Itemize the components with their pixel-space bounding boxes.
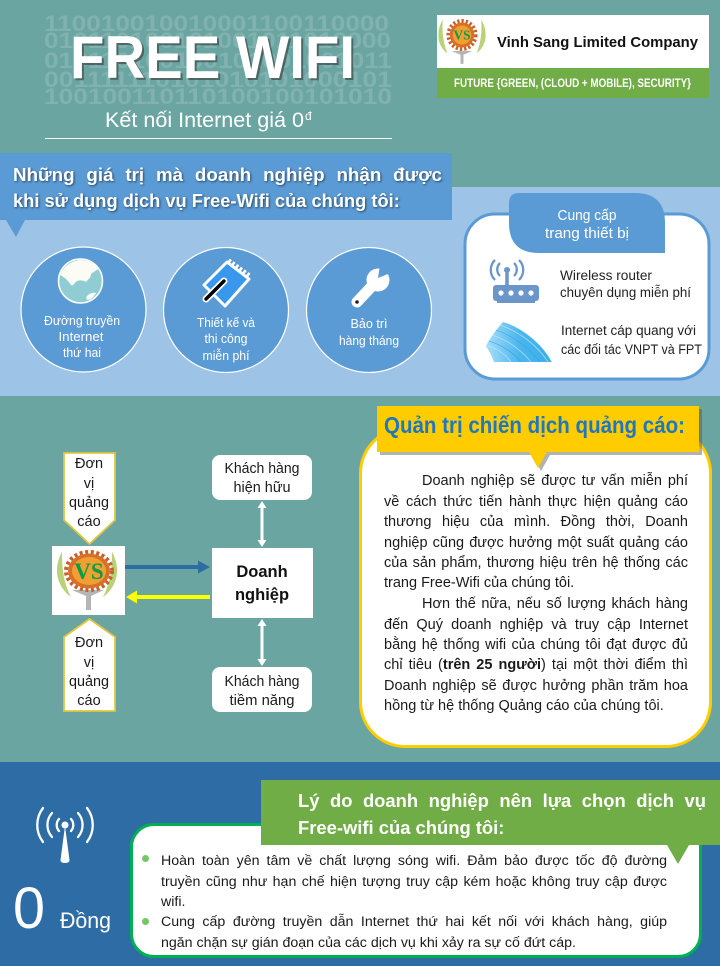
icon: notebook and pen: [204, 261, 250, 306]
node: business: Doanh: [236, 563, 288, 581]
body text: thương hiệu của mình. Đồng thời, Doanh: [384, 514, 688, 530]
bullet: signal quality: wifi.: [161, 894, 185, 910]
bullet: signal quality: [142, 853, 667, 910]
label: Internet: [58, 330, 104, 344]
bullet: signal quality: Hoàn toàn yên tâm về chất lượng sóng wifi. Đảm bảo được tốc độ đường: [161, 853, 667, 869]
node: business: [212, 548, 313, 618]
diagram: advertising flow: [52, 452, 313, 712]
label: Đường truyền: [44, 314, 120, 328]
label: [44, 314, 120, 360]
bullet: second connection: Cung cấp đường truyền dẫn Internet thứ hai kết nối với khách hàng, giúp: [161, 914, 667, 930]
body text: chỉ tiêu (trên 25 người) tại một thời điểm thì: [384, 657, 688, 673]
binary pattern: 010110100101001011010000: [44, 28, 391, 53]
callout: top advertising unit: [64, 453, 115, 544]
body text: đến Quý doanh nghiệp và truy cập Internet: [384, 617, 688, 633]
banner: values heading: khi sử dụng dịch vụ Free-Wifi của chúng tôi:: [13, 190, 400, 211]
background: dark blue band: [0, 762, 720, 966]
circle: free design and installation: [162, 246, 290, 374]
circle: monthly maintenance: [306, 246, 432, 374]
binary pattern: 010110100100101001001011: [44, 48, 392, 73]
label: hàng tháng: [339, 334, 399, 348]
icon: globe: [58, 259, 102, 303]
title block: đ: [305, 109, 312, 123]
arrow: bottom double: [258, 619, 266, 666]
equipment text: chuyên dụng miễn phí: [560, 285, 691, 300]
binary pattern: 100100110110100100101010: [44, 84, 392, 109]
callout: bottom advertising unit: Đơn: [75, 635, 103, 651]
node: potential customers: [212, 667, 312, 712]
body text: nghiệp cũng được hưởng một suất quảng cáo: [384, 535, 688, 551]
price: 0 dong: Đồng: [60, 908, 111, 933]
bullet: second connection: [142, 914, 667, 951]
body text: của sản phẩm, thương hiệu trên hệ thống các: [384, 555, 688, 571]
body text: Hơn thế nữa, nếu số lượng khách hàng: [422, 596, 688, 612]
heading: FREE WIFI: FREE WIFI: [72, 26, 357, 93]
subtitle: Kết nối Internet giá 0: [105, 109, 304, 132]
tab heading: trang thiết bị: [545, 226, 629, 242]
bullet: second connection: ngăn chặn sự gián đoạn của các dịch vụ khi xảy ra sự cố đứt cáp.: [161, 935, 576, 951]
callout: top advertising unit: cáo: [77, 514, 101, 530]
callout: top advertising unit: Đơn: [75, 456, 103, 472]
binary pattern: [44, 11, 392, 109]
binary pattern: 001111110101010101000101: [44, 67, 392, 92]
node: business: nghiệp: [235, 586, 289, 604]
icon: logo: VS: [74, 559, 104, 584]
icon: logo: [52, 546, 125, 615]
price: 0 dong: [13, 876, 111, 941]
equipment text: các đối tác VNPT và FPT: [561, 342, 702, 357]
icon: fibre optic cable: [486, 322, 552, 362]
circle: second internet line: [20, 246, 147, 373]
equipment text: Internet cáp quang với: [561, 323, 696, 338]
arrow: top double: [258, 501, 266, 547]
node: existing customers: [212, 455, 312, 500]
node: existing customers: hiện hữu: [234, 480, 290, 496]
body text: [384, 472, 688, 714]
arrow: blue to business: [125, 560, 210, 574]
heading banner: ad campaign management: [377, 406, 702, 471]
heading: FREE WIFI: FREE WIFI: [70, 24, 355, 91]
icon: wifi antenna: [36, 806, 94, 863]
price: 0 dong: 0: [13, 876, 45, 941]
background: light blue band: [0, 187, 720, 396]
node: potential customers: tiềm năng: [230, 693, 294, 709]
icon: wrench: [355, 265, 393, 304]
heading banner: reasons: Free-wifi của chúng tôi:: [298, 817, 504, 838]
banner: values heading: Những giá trị mà doanh nghiệp nhận được: [13, 164, 442, 185]
body text: Doanh nghiệp sẽ được tư vấn miễn phí: [422, 473, 688, 489]
callout: bottom advertising unit: vị: [84, 655, 94, 671]
equipment text: Wireless router: [560, 268, 652, 283]
title block: [44, 11, 392, 139]
label: [197, 316, 255, 363]
heading banner: reasons: [261, 780, 720, 864]
label: thi công: [204, 332, 248, 346]
binary pattern: 110010010010001100110000: [44, 11, 389, 36]
body text: trang Free-Wifi của chúng tôi.: [384, 575, 574, 591]
callout: bottom advertising unit: cáo: [77, 693, 101, 709]
label: thứ hai: [63, 346, 101, 360]
icon: router: [491, 260, 539, 303]
label: Thiết kế và: [197, 316, 255, 330]
panel: ad campaign management: [359, 436, 712, 748]
label: miễn phí: [202, 348, 250, 363]
callout: bottom advertising unit: quảng: [69, 674, 109, 690]
body text: bằng hệ thống wifi của chúng tôi đạt được đủ: [384, 637, 688, 653]
bullet: signal quality: truyền cũng như hạn chế hiện tượng truy cập kém hoặc không truy cập được: [161, 874, 667, 890]
icon: small logo: [438, 20, 486, 64]
callout: bottom advertising unit: [64, 619, 115, 711]
arrow: yellow to logo: [126, 590, 210, 604]
heading banner: reasons: Lý do doanh nghiệp nên lựa chọn dịch vụ: [298, 790, 706, 811]
label: [339, 317, 399, 348]
node: potential customers: Khách hàng: [224, 674, 300, 690]
node: existing customers: Khách hàng: [224, 461, 300, 477]
banner: values heading: [0, 153, 452, 237]
company logo card: Vinh Sang Limited Company: [497, 34, 699, 51]
label: Bảo trì: [350, 317, 388, 331]
equipment text: [560, 268, 702, 357]
company logo card: [437, 15, 709, 98]
body text: Doanh nghiệp sẽ được hưởng phần trăm hoa: [384, 678, 688, 694]
icon: small logo: VS: [453, 27, 471, 43]
tab heading: [509, 193, 665, 253]
panel: reasons list: [130, 823, 702, 958]
callout: top advertising unit: quảng: [69, 495, 109, 511]
heading banner: ad campaign management: Quản trị chiến dịch quảng cáo:: [384, 412, 685, 438]
callout: top advertising unit: vị: [84, 476, 94, 492]
body text: về cách thức tiến hành thực hiện quảng cáo: [384, 494, 688, 510]
panel: equipment supply: [464, 193, 710, 380]
tab heading: Cung cấp: [558, 208, 616, 224]
body text: hồng từ hệ thống Quảng cáo của chúng tôi.: [384, 698, 664, 714]
